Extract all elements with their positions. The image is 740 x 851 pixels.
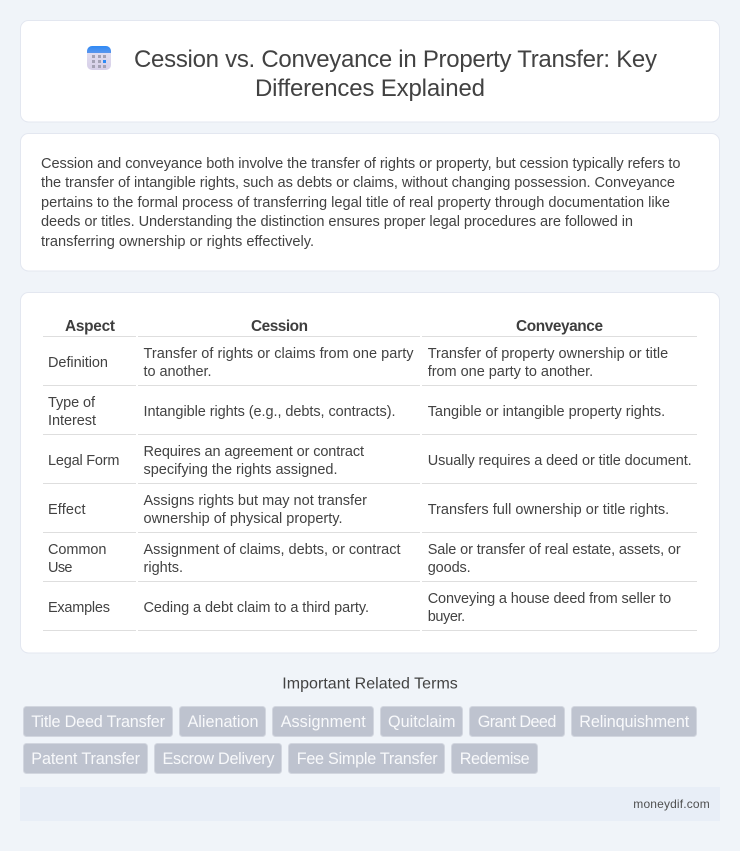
tag: Grant Deed: Grant Deed [478, 713, 556, 731]
row: examples: buyer. [428, 609, 465, 625]
title: Differences Explained [255, 75, 485, 102]
row: legal form: Requires an agreement or contract [144, 444, 364, 460]
tag: Redemise: Redemise [460, 750, 530, 768]
tag: Quitclaim [380, 706, 462, 736]
tag: Relinquishment: Relinquishment [579, 713, 690, 731]
row: effect: Effect [48, 502, 86, 518]
panel: title header [20, 20, 720, 122]
tag: Title Deed Transfer: Title Deed Transfer [31, 713, 166, 731]
row: definition: Transfer of property ownership or title [428, 346, 668, 362]
row: type of interest: Interest [48, 413, 96, 429]
row: common use: Common [48, 542, 106, 558]
text block: introduction paragraph: Cession and conveyance both involve the transfer of rights or property, but cession typically refers to [41, 156, 680, 172]
text block: introduction paragraph: pertains to the formal process of transferring legal title of real property through documentation like [41, 195, 670, 211]
row: type of interest [48, 395, 665, 429]
row: common use [48, 542, 681, 576]
row: type of interest: Tangible or intangible property rights. [428, 404, 665, 420]
row: legal form [48, 444, 692, 478]
row: effect: ownership of physical property. [144, 511, 342, 527]
row: common use: goods. [428, 560, 471, 576]
row: common use: Sale or transfer of real estate, assets, or [428, 542, 681, 558]
heading: important related terms: Important Related Terms [282, 676, 458, 692]
row: definition: Transfer of rights or claims from one party [144, 346, 414, 362]
tag: Patent Transfer: Patent Transfer [31, 750, 141, 768]
table header: Conveyance [516, 318, 603, 335]
row: effect: Assigns rights but may not transfer [144, 493, 367, 509]
row: definition: to another. [144, 364, 212, 380]
row: definition: Definition [48, 355, 108, 371]
tag: Assignment: Assignment [281, 713, 366, 731]
tag: Alienation [180, 706, 266, 736]
text block: introduction paragraph [41, 156, 680, 250]
footer text: site name: moneydif.com [633, 797, 710, 811]
tag: Quitclaim: Quitclaim [388, 713, 456, 731]
row: examples: Conveying a house deed from seller to [428, 591, 671, 607]
text block: introduction paragraph: transferring ownership or rights effectively. [41, 234, 314, 250]
tag list: related terms [24, 706, 696, 774]
row: effect: Transfers full ownership or title rights. [428, 502, 669, 518]
row: legal form: Usually requires a deed or title document. [428, 453, 692, 469]
row: examples: Ceding a debt claim to a third party. [144, 600, 369, 616]
row: type of interest: Type of [48, 395, 96, 411]
title: Cession vs. Conveyance in Property Transfer: Key [134, 46, 657, 73]
tag: Patent Transfer [24, 744, 148, 774]
row: common use: Assignment of claims, debts, or contract [144, 542, 400, 558]
footer [20, 787, 720, 821]
title [134, 46, 657, 102]
panel: introduction [20, 134, 720, 271]
table header [65, 318, 603, 335]
tag: Escrow Delivery [154, 744, 282, 774]
row: effect [48, 493, 669, 527]
text block: introduction paragraph: deeds or titles. Understanding the distinction ensures proper legal procedures are followed in [41, 214, 633, 230]
row: common use: rights. [144, 560, 183, 576]
row: definition: from one party to another. [428, 364, 593, 380]
panel: comparison table [20, 292, 720, 653]
icon: calendar [87, 46, 111, 70]
tag: Alienation: Alienation [188, 713, 258, 731]
row: legal form: specifying the rights assigned. [144, 462, 338, 478]
tag: Fee Simple Transfer: Fee Simple Transfer [297, 750, 438, 768]
tag: Assignment [272, 706, 374, 736]
row: legal form: Legal Form [48, 453, 120, 469]
tag: Escrow Delivery: Escrow Delivery [162, 750, 275, 768]
table header: Cession [251, 318, 308, 335]
row: definition [48, 346, 668, 380]
text block: introduction paragraph: the transfer of intangible rights, such as debts or claims, without changing possession. Conveyance [41, 175, 675, 191]
tag: Fee Simple Transfer [288, 744, 444, 774]
tag: Relinquishment [572, 706, 696, 736]
row: type of interest: Intangible rights (e.g., debts, contracts). [144, 404, 396, 420]
tag: Grant Deed [470, 706, 564, 736]
tag: Redemise [452, 744, 538, 774]
row: examples [48, 591, 671, 625]
tag: Title Deed Transfer [24, 706, 172, 736]
row: common use: Use [48, 560, 72, 576]
table header: Aspect [65, 318, 115, 335]
row: examples: Examples [48, 600, 110, 616]
